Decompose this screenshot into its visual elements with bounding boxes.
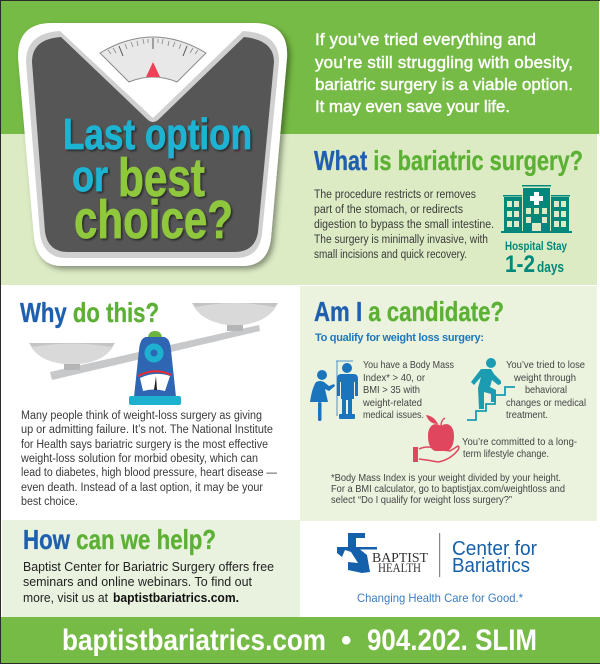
text: how can we help body: baptistbariatrics.com.: [113, 590, 239, 605]
intro text: It may even save your life.: [315, 97, 510, 116]
text: BMI criterion: Index* > 40, or: [363, 372, 425, 384]
logo wordmark: [372, 551, 428, 575]
intro text: bariatric surgery is a viable option.: [315, 75, 573, 94]
footer contact: [62, 624, 537, 657]
text: BMI criterion: weight-related: [362, 397, 422, 409]
text: BMI criterion: [362, 359, 454, 421]
text: how can we help body: seminars and online webinars. To find out: [23, 574, 252, 589]
logo: Baptist Health Center for Bariatrics: [337, 533, 537, 577]
text: BMI footnote: *Body Mass Index is your weight divided by your height.: [331, 472, 561, 484]
text: why do this body: best choice.: [21, 496, 78, 508]
text: lifestyle attempts criterion: [506, 359, 586, 421]
hospital stay stat: 1-2: [505, 251, 535, 278]
divider: [439, 533, 440, 577]
text: why do this body: Many people think of weight-loss surgery as giving: [21, 410, 262, 422]
text: what is bariatric surgery body: The procedure restricts or removes: [314, 189, 476, 201]
text: what is bariatric surgery body: part of the stomach, or redirects: [314, 204, 463, 216]
panel: how can we help background: [2, 520, 300, 617]
panel: am I a candidate background: [300, 286, 597, 521]
text: why do this body: lead to diabetes, high blood pressure, heart disease —: [21, 467, 277, 479]
text: what is bariatric surgery body: digestion to bypass the small intestine.: [314, 219, 494, 231]
title: last option or best choice: or: [72, 152, 108, 201]
hospital stay stat: Hospital Stay: [505, 239, 567, 253]
text: why do this body: up or admitting failure. It’s not. The National Institute: [21, 424, 273, 436]
text: commitment criterion: term lifestyle change.: [463, 448, 549, 460]
icon: hospital: [501, 185, 572, 233]
logo center name: [452, 538, 537, 577]
text: how can we help body: [23, 559, 274, 605]
text: BMI footnote: For a BMI calculator, go to baptistjax.com/weightloss and: [331, 483, 565, 495]
panel: footer band: [1, 617, 600, 663]
title: last option or best choice: choice?: [74, 190, 233, 250]
title: last option or best choice: [63, 110, 252, 250]
footer contact: baptistbariatrics.com: [62, 624, 326, 657]
text: lifestyle attempts criterion: behavioral: [525, 384, 567, 396]
text: BMI criterion: You have a Body Mass: [363, 359, 454, 371]
text: what is bariatric surgery body: small incisions and quick recovery.: [314, 249, 467, 261]
text: lifestyle attempts criterion: changes or medical: [506, 397, 586, 409]
icon: apple in hand: [413, 415, 459, 462]
icon: balance scale: [29, 303, 278, 405]
text: lifestyle attempts criterion: You’ve tried to lose: [506, 359, 585, 371]
heading: how can we help: How can we help?: [23, 524, 216, 555]
heading: why do this: Why do this?: [20, 297, 159, 328]
logo wordmark: HEALTH: [378, 560, 421, 575]
text: what is bariatric surgery body: The surgery is minimally invasive, with: [314, 234, 488, 246]
footer contact: •: [341, 624, 352, 657]
title: last option or best choice: best: [118, 148, 205, 208]
text: lifestyle attempts criterion: weight through: [513, 372, 576, 384]
tagline: Changing Health Care for Good.*: [357, 591, 523, 605]
logo wordmark: BAPTIST: [372, 551, 428, 566]
text: BMI footnote: select “Do I qualify for weight loss surgery?”: [331, 494, 512, 506]
footer contact: 904.202. SLIM: [367, 624, 537, 657]
panel: top green banner: [1, 1, 599, 134]
text: lifestyle attempts criterion: treatment.: [506, 409, 548, 421]
text: commitment criterion: [462, 436, 577, 460]
text: what is bariatric surgery body: [314, 189, 494, 261]
logo mark: [337, 533, 377, 573]
title: last option or best choice: Last option: [63, 110, 252, 159]
text: how can we help body: Baptist Center for Bariatric Surgery offers free: [23, 559, 274, 574]
logo center name: Bariatrics: [452, 555, 530, 577]
intro text: If you’ve tried everything and: [315, 30, 536, 49]
text: BMI criterion: BMI > 35 with: [363, 384, 420, 396]
intro text: you’re still struggling with obesity,: [315, 53, 573, 72]
subheading: to qualify: To qualify for weight loss surgery:: [315, 332, 484, 344]
hospital stay stat: [505, 239, 567, 278]
text: BMI criterion: medical issues.: [363, 409, 424, 421]
text: why do this body: weight-loss solution for morbid obesity, which can: [20, 453, 258, 465]
text: why do this body: for Health says bariatric surgery is the most effective: [21, 439, 268, 451]
intro text: [315, 30, 573, 116]
panel: what is bariatric surgery background: [1, 134, 597, 285]
icon: bathroom scale: [18, 23, 287, 266]
text: commitment criterion: You’re committed to a long-: [462, 436, 577, 448]
heading: am I a candidate: Am I a candidate?: [314, 296, 504, 327]
scale dial: [100, 37, 206, 82]
logo center name: Center for: [452, 538, 537, 560]
text: why do this body: [20, 410, 277, 508]
icon: person climbing stairs: [467, 358, 515, 420]
text: BMI footnote: [331, 472, 565, 506]
hospital stay stat: days: [537, 259, 564, 276]
icon: doctor measuring patient: [310, 361, 358, 421]
text: why do this body: even death. Instead of a last option, it may be your: [21, 482, 263, 494]
text: how can we help body: more, visit us at: [23, 590, 108, 605]
